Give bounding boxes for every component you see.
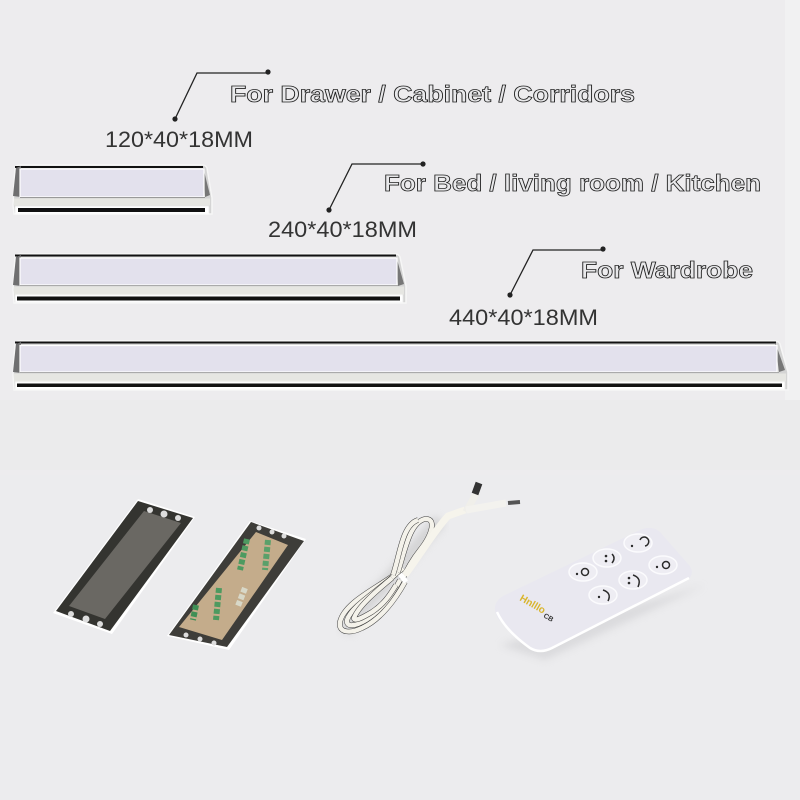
dimension: 440mm: 440*40*18MM bbox=[449, 305, 598, 330]
callout: wardrobe use bbox=[507, 246, 753, 298]
mounting plate: front bbox=[53, 499, 195, 634]
callout: wardrobe use: For Wardrobe bbox=[581, 257, 753, 283]
light bar: 440mm bbox=[13, 341, 788, 390]
mounting plate: adhesive back bbox=[167, 521, 306, 650]
remote logo: Hnlllo bbox=[518, 593, 547, 616]
remote control: CB bbox=[542, 613, 554, 624]
dimension: 120mm: 120*40*18MM bbox=[105, 127, 253, 152]
callout: bedroom use bbox=[326, 161, 761, 213]
callout: drawer use: For Drawer / Cabinet / Corridors bbox=[230, 81, 635, 107]
callout: drawer use bbox=[172, 69, 635, 122]
callout: bedroom use: For Bed / living room / Kitchen bbox=[384, 170, 761, 196]
USB cable bbox=[340, 483, 520, 632]
light bar: 240mm bbox=[13, 254, 406, 303]
dimension: 240mm: 240*40*18MM bbox=[268, 217, 417, 242]
remote control bbox=[495, 528, 705, 660]
remote buttons bbox=[569, 534, 677, 604]
light bar: 120mm bbox=[13, 165, 212, 214]
